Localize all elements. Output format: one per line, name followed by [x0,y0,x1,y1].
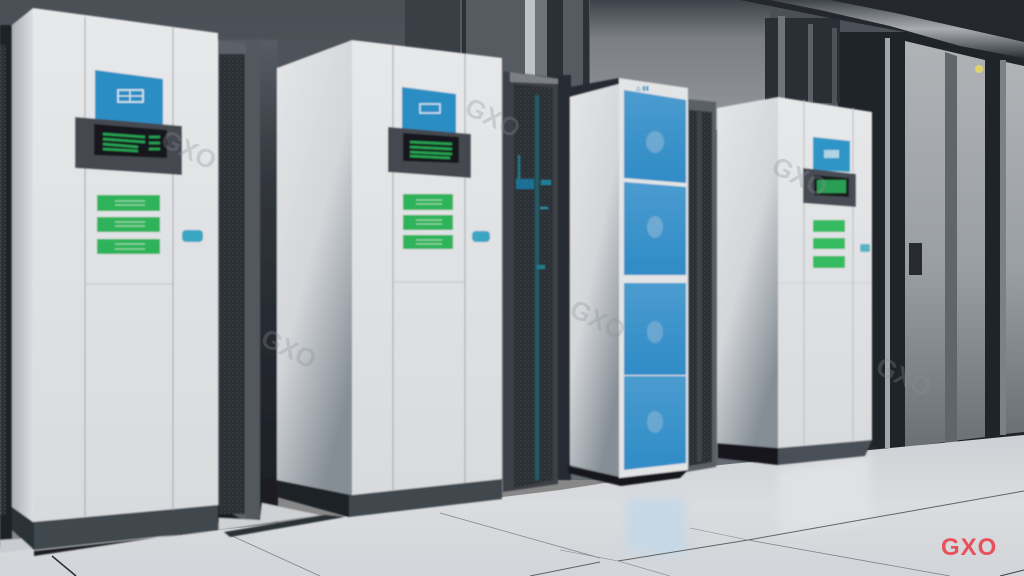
cabinet 3 with blue doors [568,78,688,486]
control display 1 [75,117,182,175]
watermark labels: GXO [156,123,221,176]
cabinet 2 [277,40,502,517]
door: left tall cabinet [905,41,985,447]
watermark labels: GXO [256,322,321,375]
brand mark: GXO [941,534,997,561]
blue door 3 [624,283,686,375]
cabinet 4 [717,97,872,465]
watermark labels [156,91,936,403]
cabinet 3 with blue doors: △ ▮▮ [635,85,649,92]
far-left rack edge [0,25,34,553]
status labels 1 [97,195,160,254]
control display 2 [388,127,471,178]
cabinet 1 [12,8,218,556]
indicator button 4 [860,244,870,252]
status labels 4 [813,220,845,268]
rack: behind blue cabinet [686,99,716,472]
indicator button 2 [472,231,490,242]
ceiling and duct [740,0,1024,62]
control display 4 [803,168,856,207]
door: far right cabinet [1000,60,1024,435]
rack: middle with teal lights [503,71,571,492]
watermark labels: GXO [565,293,630,346]
logo panel 1 [95,70,163,125]
status labels 2 [403,194,453,249]
blue door 4 [624,376,686,470]
logo panel 4 [813,137,850,172]
logo panel 2 [402,87,456,134]
watermark labels: GXO [460,91,525,144]
blue door 2 [624,182,686,275]
far right cabinets [765,16,1024,452]
floor [0,435,1024,576]
blue door 1 [624,90,686,183]
watermark labels: GXO [871,350,936,403]
watermark labels: GXO [767,150,832,203]
indicator button 1 [182,230,203,242]
rack: beside cabinet 1 [218,39,345,537]
